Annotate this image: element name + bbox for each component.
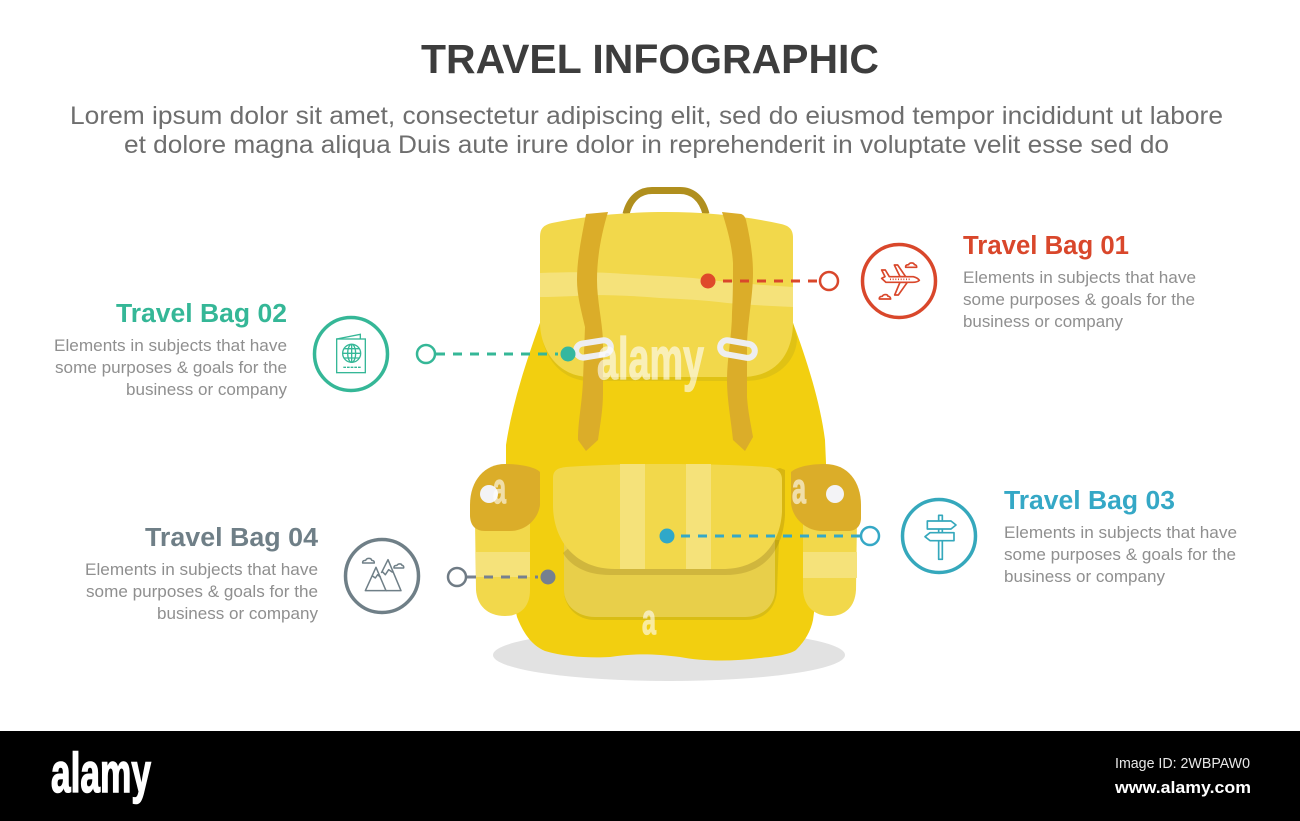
label: Travel Bag 03 <box>1004 487 1237 586</box>
connector 01 <box>700 272 838 290</box>
left strap <box>577 212 608 451</box>
backpack body <box>506 320 826 661</box>
front pocket flap shadow <box>563 468 785 575</box>
image id: Image ID: 2WBPAW0 <box>1115 755 1250 772</box>
label: Travel Bag 01: Elements in subjects that have <box>963 268 1196 287</box>
watermark: a <box>493 465 507 513</box>
connector 03 <box>660 527 879 545</box>
icon: passport <box>314 318 388 390</box>
connector 04 <box>448 568 556 586</box>
flap stripe <box>540 272 793 307</box>
label: Travel Bag 01 <box>963 232 1196 331</box>
icon: mountains <box>346 540 418 612</box>
label: Travel Bag 04 <box>85 524 319 623</box>
strap buckles <box>575 339 756 359</box>
backpack illustration <box>470 190 861 681</box>
front pocket flap <box>553 464 782 569</box>
pocket flap stripes <box>620 464 711 569</box>
front pocket body <box>564 540 779 620</box>
intro text: Lorem ipsum dolor sit amet, consectetur adipiscing elit, sed do eiusmod tempor incididunt ut labore <box>70 102 1223 130</box>
label: Travel Bag 02: business or company <box>126 380 287 399</box>
title: TRAVEL INFOGRAPHIC <box>421 36 879 82</box>
label: Travel Bag 03: some purposes & goals for the <box>1004 545 1236 564</box>
intro text <box>70 102 1223 159</box>
label: Travel Bag 03: business or company <box>1004 567 1165 586</box>
left side pocket <box>470 464 540 616</box>
handle <box>626 190 706 214</box>
ground shadow <box>493 629 845 681</box>
label: Travel Bag 03: Elements in subjects that have <box>1004 523 1237 542</box>
watermark: a <box>792 465 807 513</box>
label: Travel Bag 02: Elements in subjects that have <box>54 336 287 355</box>
label: Travel Bag 04: Elements in subjects that have <box>85 560 318 579</box>
icon: airplane <box>862 244 936 318</box>
label: Travel Bag 03: Travel Bag 03 <box>1004 487 1175 515</box>
label: Travel Bag 02: some purposes & goals for the <box>55 358 287 377</box>
label: Travel Bag 04: some purposes & goals for the <box>86 582 318 601</box>
label: Travel Bag 01: Travel Bag 01 <box>963 232 1129 260</box>
footer bar <box>0 731 1300 821</box>
label: Travel Bag 04: business or company <box>157 604 318 623</box>
footer logo: alamy <box>51 741 151 804</box>
main flap shadow <box>541 323 797 381</box>
watermark <box>493 326 807 644</box>
watermark: a <box>642 596 657 644</box>
label: Travel Bag 04: Travel Bag 04 <box>145 524 319 552</box>
connector 02 <box>417 345 576 363</box>
watermark: alamy <box>597 326 704 392</box>
right strap <box>722 212 753 451</box>
main flap <box>540 212 793 377</box>
website: www.alamy.com <box>1114 778 1251 797</box>
intro text: et dolore magna aliqua Duis aute irure dolor in reprehenderit in voluptate velit esse sed do <box>124 131 1169 159</box>
label: Travel Bag 01: some purposes & goals for the <box>963 290 1195 309</box>
label: Travel Bag 01: business or company <box>963 312 1123 331</box>
icon: signpost <box>902 500 976 572</box>
right side pocket <box>791 464 861 616</box>
label: Travel Bag 02: Travel Bag 02 <box>116 300 287 328</box>
label: Travel Bag 02 <box>54 300 287 399</box>
